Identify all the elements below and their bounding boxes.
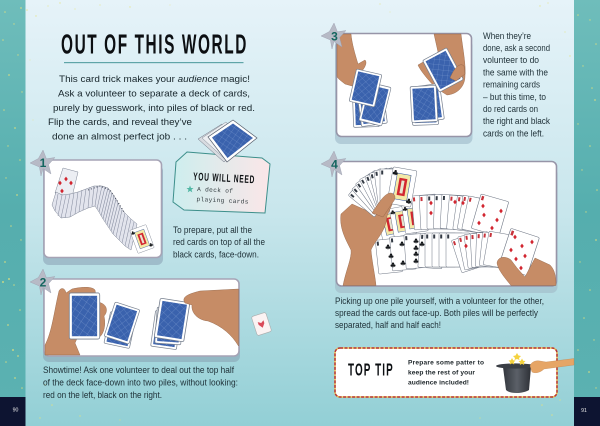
panel 3 shadow	[335, 40, 472, 144]
step 1 badge	[30, 150, 55, 176]
left teal band	[0, 0, 26, 426]
page number box: 91: 91	[581, 408, 587, 414]
upper arc of cards	[377, 194, 509, 241]
step 2 text: red on the left, black on the right.	[43, 390, 162, 400]
card ribbon illustration	[52, 186, 137, 250]
intro text: Flip the cards, and reveal they’ve	[48, 117, 192, 128]
step 2 badge: 2	[40, 276, 47, 290]
right hand	[184, 289, 238, 346]
intro text	[48, 74, 255, 142]
step 2 text: of the deck face-down into two piles, without looking:	[43, 378, 238, 388]
panel 4 shadow	[335, 168, 558, 293]
right teal band	[574, 0, 600, 426]
left thumb	[372, 193, 395, 217]
panel 1 shadow	[43, 165, 163, 265]
right pile	[151, 298, 190, 350]
step 4 text: spread the cards out face-up. Both piles will be perfectly	[335, 308, 538, 318]
card held in left hand	[349, 69, 382, 107]
top tip text: keep the rest of your	[408, 370, 475, 376]
step 4 text	[335, 296, 544, 330]
top tip panel	[335, 348, 574, 397]
step 3 text: When they’re	[483, 31, 531, 41]
step 3 text: do red cards on	[483, 104, 538, 114]
tag heading: YOU WILL NEED	[193, 170, 255, 186]
step 4 text: separated, half and half each!	[335, 320, 441, 330]
right thumb	[450, 65, 465, 81]
step 3 text: – but this time, to	[483, 92, 546, 102]
right pile	[410, 83, 444, 125]
step 2 text: Showtime! Ask one volunteer to deal out the top half	[43, 365, 234, 375]
step 3 text: the same with the	[483, 68, 548, 78]
you will need tag	[173, 152, 270, 213]
step 4 badge	[321, 151, 346, 177]
card held in right hand	[422, 48, 464, 92]
panel 1: spread of cards	[44, 160, 162, 258]
step 1 text: To prepare, put all the	[173, 225, 252, 235]
jack of clubs card	[130, 225, 154, 253]
intro text: done an almost perfect job . . .	[52, 132, 187, 142]
step 2 badge	[30, 269, 55, 295]
left pile	[352, 82, 391, 127]
top tip text: Prepare some patter to	[408, 360, 484, 366]
intro text: Ask a volunteer to separate a deck of cards,	[58, 88, 250, 100]
tag item	[196, 186, 249, 206]
left hand	[337, 34, 366, 86]
top tip text: audience included!	[408, 380, 469, 386]
title: OUT OF THIS WORLD	[61, 29, 248, 60]
panel 2: dealing cards	[44, 279, 239, 356]
right hand holding cards	[497, 257, 556, 286]
step 4 badge: 4	[331, 158, 338, 172]
small heart card illustration	[251, 312, 272, 336]
step 3 badge: 3	[331, 30, 338, 44]
left hand card fan	[348, 167, 417, 217]
right hand	[418, 34, 465, 95]
step 3 text: the right and black	[483, 116, 550, 126]
step 1 text: black cards, face-down.	[173, 250, 259, 260]
panel 2 shadow	[43, 285, 240, 362]
icon: magician arm	[530, 358, 574, 373]
left hand holding fan	[341, 193, 395, 286]
icon: magician hat	[496, 353, 535, 393]
title underline	[64, 62, 244, 63]
lower row of cards	[375, 228, 539, 276]
left pile	[104, 302, 140, 349]
tag shape	[173, 152, 270, 213]
step 1 text: red cards on top of all the	[173, 237, 265, 247]
dashed frame	[335, 348, 557, 397]
step 1 text	[173, 225, 265, 260]
back of left hand fingers	[98, 302, 106, 338]
panel 4: fanned face-up cards	[336, 162, 556, 286]
tag item: A deck of	[197, 186, 233, 195]
page number box: 90: 90	[13, 408, 18, 414]
step 1 badge: 1	[40, 156, 47, 170]
step 2 text	[43, 365, 238, 400]
step 3 text: remaining cards	[483, 80, 540, 90]
tag item: playing cards	[196, 196, 249, 206]
tag star bullet	[186, 186, 194, 192]
top tip heading: TOP TIP	[348, 361, 394, 380]
intro text: purely by guesswork, into piles of black or red.	[53, 103, 255, 114]
illustration: deck of cards	[198, 120, 257, 162]
intro text: This card trick makes your audience magic!	[59, 74, 250, 85]
step 3 text: done, ask a second	[483, 43, 550, 53]
step 3 text: cards on the left.	[483, 128, 544, 138]
left hand	[45, 287, 96, 355]
step 3 badge	[321, 23, 346, 49]
page number box: 91	[574, 397, 600, 426]
step 4 text: Picking up one pile yourself, with a volunteer for the other,	[335, 296, 544, 306]
top card of ribbon	[55, 168, 78, 197]
card held in left hand	[69, 293, 100, 339]
step 3 text	[483, 31, 550, 138]
page number box: 90	[0, 397, 26, 426]
panel 3: second volunteer	[336, 34, 472, 136]
top tip text	[408, 360, 484, 386]
step 3 text: volunteer to do	[483, 55, 539, 65]
